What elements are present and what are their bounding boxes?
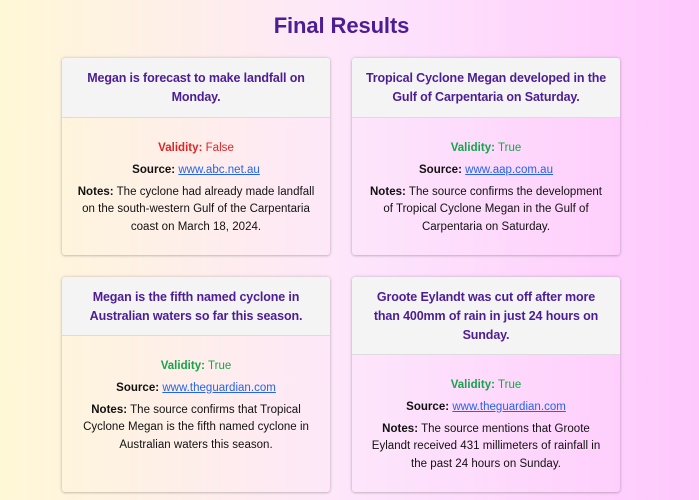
claim heading: Gulf of Carpentaria on Saturday.	[392, 90, 580, 104]
validity: Validity: True	[451, 379, 521, 391]
source: Source: www.abc.net.au	[132, 164, 260, 176]
title: Final Results	[274, 13, 409, 38]
validity: Validity: True	[161, 360, 231, 372]
panel: Megan landfall claim	[62, 58, 330, 255]
notes: Australian waters this season.	[119, 439, 273, 451]
claim heading: Sunday.	[463, 328, 509, 342]
claim heading	[62, 277, 330, 336]
notes: coast on March 18, 2024.	[131, 221, 261, 233]
claim heading: Australian waters so far this season.	[90, 309, 302, 323]
claim details	[372, 379, 600, 470]
notes	[372, 423, 600, 470]
notes: the past 24 hours on Sunday.	[411, 458, 561, 470]
notes: Notes: The cyclone had already made landfall	[78, 186, 314, 198]
notes: of Tropical Cyclone Megan in the Gulf of	[383, 203, 589, 215]
claim heading: Monday.	[172, 90, 220, 104]
panel: Megan development claim	[352, 58, 620, 255]
claim heading	[352, 277, 620, 355]
claim details	[83, 360, 309, 451]
claim heading	[352, 58, 620, 118]
claim heading	[62, 58, 330, 118]
claim heading: than 400mm of rain in just 24 hours on	[374, 309, 598, 323]
claim heading: Megan is forecast to make landfall on	[87, 71, 305, 85]
source: Source: www.aap.com.au	[419, 164, 553, 176]
notes: Cyclone Megan is the fifth named cyclone in	[83, 421, 309, 433]
validity: Validity: True	[451, 142, 521, 154]
notes	[78, 186, 314, 233]
source: Source: www.theguardian.com	[116, 382, 276, 394]
notes: Notes: The source confirms the development	[370, 186, 602, 198]
notes: Notes: The source mentions that Groote	[382, 423, 590, 435]
notes	[83, 404, 309, 451]
notes: Eylandt received 431 millimeters of rainfall in	[372, 440, 600, 452]
notes: on the south-western Gulf of the Carpentaria	[82, 203, 310, 215]
claim details	[78, 142, 314, 233]
claim heading: Megan is the fifth named cyclone in	[93, 290, 299, 304]
claim details	[370, 142, 602, 233]
source: Source: www.theguardian.com	[406, 401, 566, 413]
validity: Validity: False	[158, 142, 234, 154]
panel: fifth named cyclone claim	[62, 277, 330, 492]
notes	[370, 186, 602, 233]
panel: Groote Eylandt rainfall claim	[352, 277, 620, 492]
notes: Notes: The source confirms that Tropical	[91, 404, 301, 416]
notes: Carpentaria on Saturday.	[422, 221, 550, 233]
claim heading: Groote Eylandt was cut off after more	[377, 290, 595, 304]
claim heading: Tropical Cyclone Megan developed in the	[366, 71, 606, 85]
